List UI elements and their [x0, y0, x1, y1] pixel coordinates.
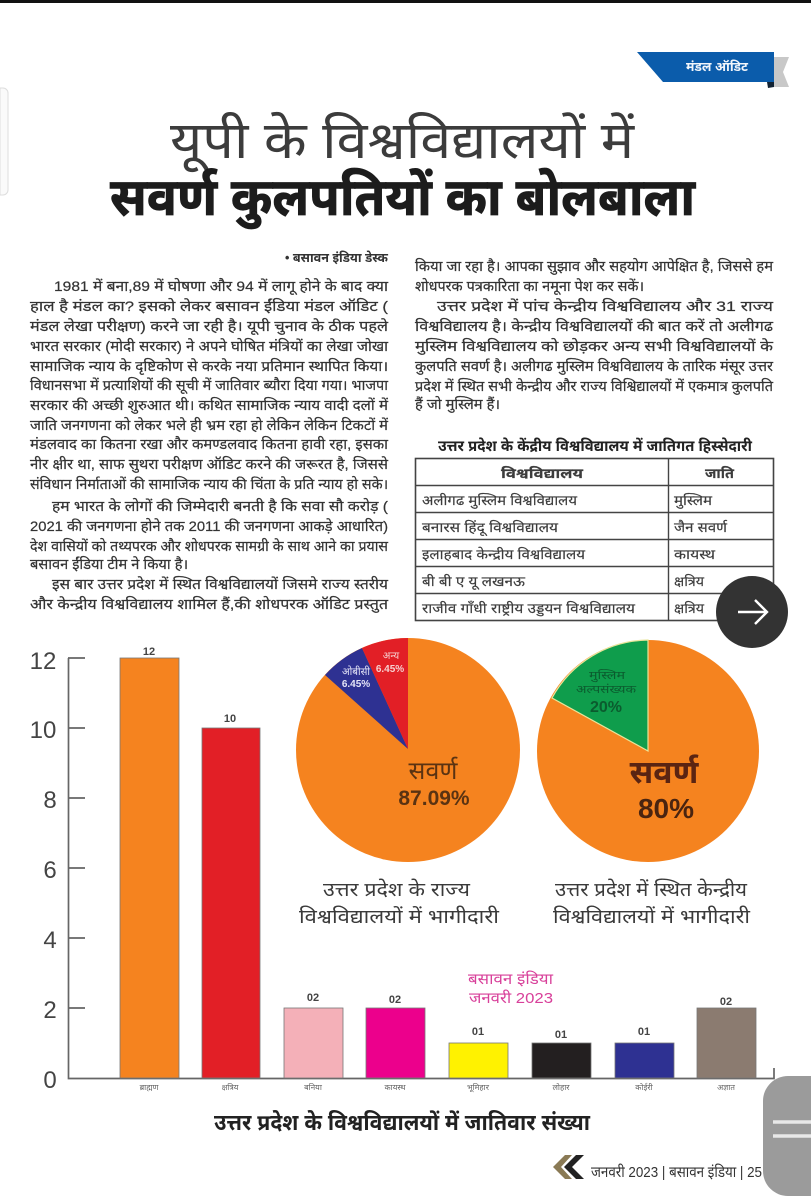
article text: left column: भारत सरकार (मोदी सरकार) ने अपने घोषित मंत्रियों का लेखा जोखा [30, 337, 388, 354]
byline: • बसावन इंडिया डेस्क [285, 250, 388, 265]
article text: left column: नीर क्षीर था, साफ सुथरा परीक्षण ऑडिट करने की जरूरत है, जिससे [30, 455, 389, 474]
y axis labels [30, 648, 57, 1094]
source credit: बसावन इंडिया [468, 971, 554, 988]
pie labels: अन्य [383, 651, 399, 662]
bar values: 01 [638, 1026, 650, 1038]
y axis labels: 8 [43, 787, 57, 814]
bar values: 01 [472, 1026, 484, 1038]
y axis labels: 0 [43, 1067, 57, 1094]
article text: left column [30, 277, 389, 614]
article text: left column: और केन्द्रीय विश्वविद्यालय शामिल हैं,की शोधपरक ऑडिट प्रस्तुत [30, 595, 389, 614]
article text: left column: इस बार उत्तर प्रदेश में स्थित विश्वविद्यालयों जिसमे राज्य स्तरीय [52, 575, 389, 592]
bar values: 02 [389, 994, 401, 1006]
y axis [68, 658, 774, 1078]
y axis labels: 6 [43, 857, 57, 884]
table: caste share in central universities: कायस्थ [674, 547, 715, 562]
article text: right column: मुस्लिम विश्वविद्यालय को छोड़कर अन्य सभी विश्वविद्यालयों के [415, 337, 773, 356]
overlay: next arrow button [716, 576, 788, 648]
icon: double chevron [553, 1155, 584, 1179]
article text: right column: हैं जो मुस्लिम हैं। [415, 396, 500, 414]
article text: left column: हाल है मंडल का? इसको लेकर बसावन ईंडिया मंडल ऑडिट ( [30, 297, 388, 314]
article text: right column: शोधपरक पत्रकारिता का नमूना पेश कर सकें। [415, 277, 644, 296]
y axis labels: 2 [43, 997, 57, 1024]
title [110, 111, 697, 230]
source credit [468, 971, 554, 1007]
article text: left column: देश वासियों को तथ्यपरक और शोधपरक सामग्री के साथ आने का प्रयास [30, 537, 389, 554]
bar category labels: ब्राह्मण [140, 1083, 159, 1092]
table: caste share in central universities: क्षत्रिय [674, 573, 705, 589]
bar values: 01 [555, 1029, 567, 1041]
bar category labels: कायस्थ [385, 1083, 406, 1092]
title: सवर्ण कुलपतियों का बोलबाला [110, 168, 697, 230]
table: caste share in central universities: जैन सवर्ण [674, 519, 728, 535]
article text: left column: हम भारत के लोगों की जिम्मेदारी बनती है कि सवा सौ करोड़ ( [52, 497, 388, 514]
table: caste share in central universities: राजीव गाँधी राष्ट्रीय उड्डयन विश्वविद्यालय [422, 599, 636, 617]
article text: left column: 2021 की जनगणना होने तक 2011 की जनगणना आकड़े आधारित) [30, 517, 388, 534]
pie labels: 6.45% [342, 679, 370, 690]
table heading: उत्तर प्रदेश के केंद्रीय विश्वविद्यालय में जातिगत हिस्सेदारी [438, 437, 753, 455]
bar category labels [140, 1082, 735, 1093]
article text: left column: मंडल लेखा परीक्षण) करने जा रही है। यूपी चुनाव के ठीक पहले [30, 317, 389, 336]
article text: left column: विधानसभा में प्रत्याशियों की सूची में जातिवार ब्यौरा दिया गया। भाजपा [30, 377, 388, 395]
article text: left column: बसावन ईंडिया टीम ने किया है। [30, 555, 188, 572]
caption: central universities pie: विश्वविद्यालयों में भागीदारी [553, 905, 751, 928]
pie labels: 80% [638, 793, 694, 824]
bar chart: number of vice chancellors by caste [30, 646, 774, 1094]
y axis labels: 10 [30, 717, 56, 744]
bar category labels: भूमिहार [467, 1083, 490, 1093]
table: caste share in central universities: विश्वविद्यालय [501, 465, 584, 481]
table: caste share in central universities: जाति [705, 465, 735, 481]
pie labels [576, 669, 700, 824]
caption: state universities pie [299, 878, 500, 928]
bar values: 02 [720, 996, 732, 1008]
caption: state universities pie: उत्तर प्रदेश के राज्य [323, 878, 471, 901]
pie labels: मुस्लिम [589, 669, 626, 682]
pie labels: ओबीसी [342, 666, 370, 678]
bar values [143, 646, 732, 1041]
article text: right column: कुलपति सवर्ण है। अलीगढ मुस्लिम विश्वविद्यालय के तारिक मंसूर उत्तर [415, 357, 773, 376]
table: caste share in central universities: बनारस हिंदू विश्वविद्यालय [422, 519, 559, 536]
bar category labels: बनिया [304, 1083, 323, 1092]
article text: left column: सरकार की अच्छी शुरुआत थी। कथित सामाजिक न्याय वादी दलों में [30, 397, 389, 415]
pie labels: 6.45% [376, 664, 404, 675]
caption: state universities pie: विश्वविद्यालयों में भागीदारी [299, 905, 500, 928]
bar values: 02 [307, 992, 319, 1004]
pie labels: सवर्ण [409, 756, 458, 785]
table: caste share in central universities [415, 458, 774, 621]
pie labels: 87.09% [398, 787, 470, 810]
article text: right column [415, 257, 774, 414]
overlay: scroll handle [763, 1076, 811, 1196]
section ribbon: मंडल ऑडिट [686, 59, 749, 74]
pie chart: state universities [296, 638, 520, 862]
pie labels [342, 651, 470, 810]
bar category labels: अज्ञात [717, 1083, 735, 1092]
table: caste share in central universities: क्षत्रिय [674, 600, 705, 616]
y axis labels: 12 [30, 648, 56, 675]
table: caste share in central universities: इलाहबाद केन्द्रीय विश्वविद्यालय [422, 545, 586, 562]
article text: left column: मंडलवाद का कितना रखा और कमण्डलवाद कितना हावी रहा, इसका [30, 436, 388, 452]
article text: right column: उत्तर प्रदेश में पांच केन्द्रीय विश्वविद्यालय और 31 राज्य [437, 297, 774, 314]
bar category labels: लोहार [552, 1083, 570, 1092]
table: caste share in central universities: मुस्लिम [674, 492, 713, 510]
article text: right column: प्रदेश में स्थित सभी केन्द्रीय और राज्य विश्विद्यालयों में एकमात्र कुलपति [415, 377, 774, 396]
y axis labels: 4 [43, 927, 57, 954]
page footer [553, 1155, 762, 1181]
table: caste share in central universities: अलीगढ मुस्लिम विश्वविद्यालय [422, 492, 578, 510]
page footer: जनवरी 2023 | बसावन इंडिया | 25 [591, 1164, 762, 1181]
article text: left column: 1981 में बना,89 में घोषणा और 94 में लागू होने के बाद क्या [54, 277, 388, 296]
article text: left column: संविधान निर्माताओं की सामाजिक न्याय की चिंता के प्रति न्याय हो सके। [30, 475, 388, 492]
title: यूपी के विश्वविद्यालयों में [170, 111, 636, 173]
pie chart: central universities [537, 640, 759, 862]
article text: right column: विश्वविद्यालय है। केन्द्रीय विश्वविद्यालयों की बात करें तो अलीगढ [415, 317, 774, 334]
bar category labels: क्षत्रिय [222, 1083, 239, 1092]
section ribbon [637, 52, 789, 88]
article text: right column: किया जा रहा है। आपका सुझाव और सहयोग आपेक्षित है, जिससे हम [415, 257, 774, 276]
caption: central universities pie [553, 878, 751, 928]
article text: left column: जाति जनगणना को लेकर भले ही भ्रम रहा हो लेकिन लेकिन टिकटों में [30, 416, 389, 433]
chart title: उत्तर प्रदेश के विश्वविद्यालयों में जातिवार संख्या [214, 1110, 591, 1135]
pie labels: 20% [590, 699, 622, 716]
pie labels: अल्पसंख्यक [576, 683, 637, 696]
table: caste share in central universities: बी बी ए यू लखनऊ [422, 573, 525, 591]
overlay: left edge tab [0, 88, 8, 195]
bars [120, 658, 756, 1078]
source credit: जनवरी 2023 [469, 990, 553, 1007]
bar category labels: कोईरी [635, 1082, 654, 1092]
bar values: 10 [224, 713, 236, 725]
pie labels: सवर्ण [630, 754, 700, 790]
caption: central universities pie: उत्तर प्रदेश में स्थित केन्द्रीय [555, 878, 748, 901]
bar values: 12 [143, 646, 155, 658]
article text: left column: सामाजिक न्याय के दृष्टिकोण से करके नया प्रतिमान स्थापित किया। [30, 357, 388, 375]
